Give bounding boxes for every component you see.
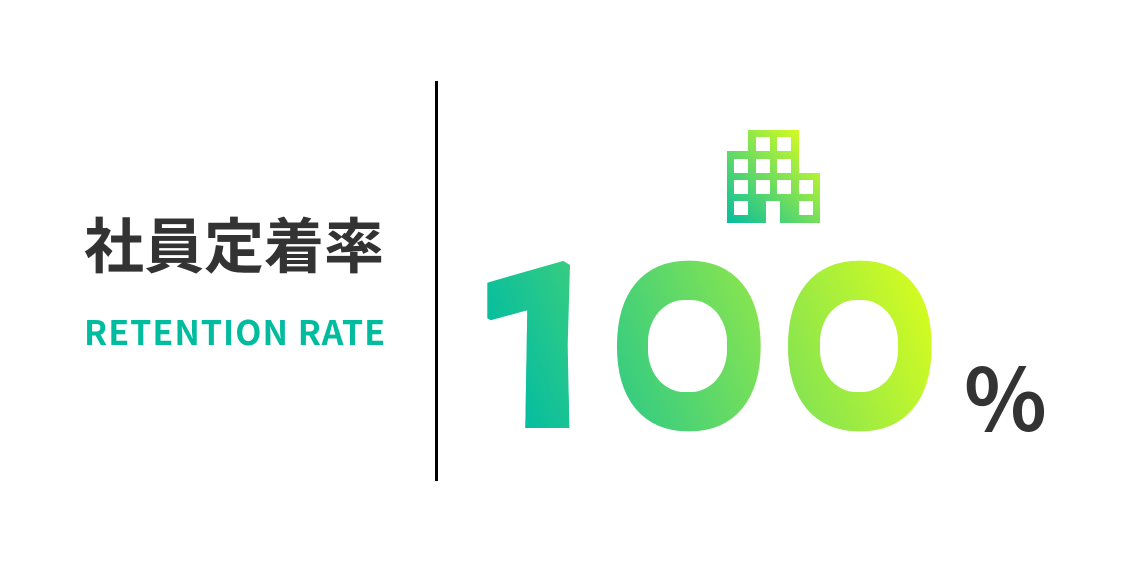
big number: 100 xyxy=(487,260,932,432)
icon: office building xyxy=(727,130,820,223)
unit: percent sign: % xyxy=(964,331,1047,456)
subheading: English title: RETENTION RATE xyxy=(84,306,385,355)
big number: 100: 0 xyxy=(614,231,763,470)
heading: Japanese title: 社員定着率 xyxy=(84,214,384,281)
vertical divider xyxy=(435,81,438,481)
big number: 100: 0 xyxy=(786,231,934,470)
big number: 100: 1 xyxy=(470,159,611,495)
